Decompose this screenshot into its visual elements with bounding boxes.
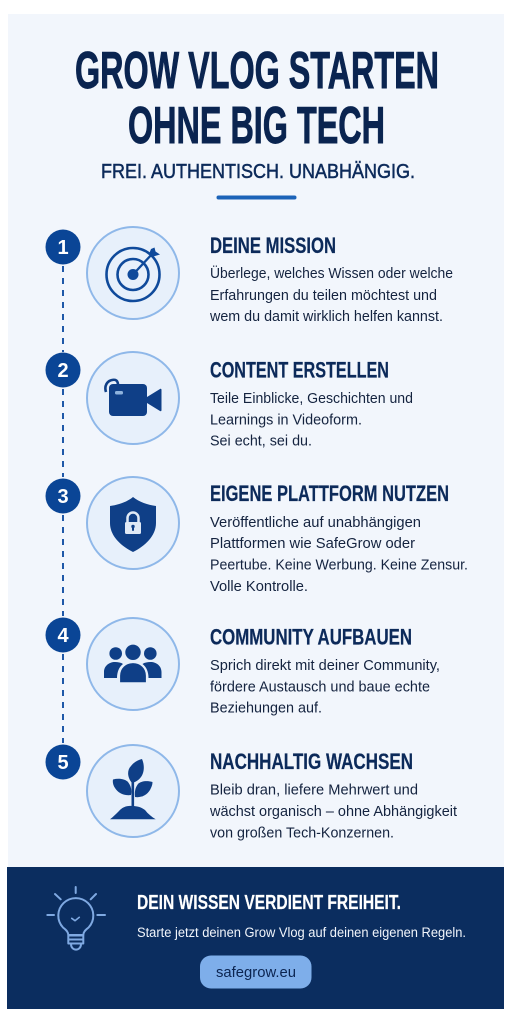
number badge 2: 2	[57, 360, 69, 382]
description	[210, 391, 413, 450]
description	[210, 658, 440, 716]
accent divider	[216, 196, 296, 200]
description: Sei echt, sei du.	[210, 434, 312, 450]
title	[75, 42, 439, 155]
icon: shield with lock	[87, 477, 179, 569]
description: Learnings in Videoform.	[210, 412, 362, 428]
description: Überlege, welches Wissen oder welche	[210, 264, 453, 282]
number badge 5: 5	[57, 752, 69, 774]
description: wächst organisch – ohne Abhängigkeit	[209, 804, 457, 820]
icon: light bulb	[47, 887, 105, 950]
footer heading: DEIN WISSEN VERDIENT FREIHEIT.	[137, 892, 401, 914]
step 5: Nachhaltig wachsen	[46, 744, 457, 842]
description: Volle Kontrolle.	[210, 579, 308, 595]
number badge 1: 1	[57, 237, 69, 259]
description: Plattformen wie SafeGrow oder	[210, 536, 415, 552]
step 1: Deine Mission	[46, 227, 453, 325]
description	[210, 515, 468, 595]
dashed timeline	[62, 266, 64, 743]
number badge 3	[46, 478, 80, 514]
icon: community group	[87, 618, 179, 710]
heading: DEINE MISSION	[210, 233, 336, 258]
number badge 4	[46, 618, 80, 652]
description: von großen Tech-Konzernen.	[210, 826, 394, 842]
button: safegrow.eu: safegrow.eu	[216, 964, 296, 981]
heading: CONTENT ERSTELLEN	[210, 358, 389, 382]
description: Beziehungen auf.	[210, 700, 322, 716]
description: Teile Einblicke, Geschichten und	[210, 391, 413, 407]
subtitle: FREI. AUTHENTISCH. UNABHÄNGIG.	[101, 161, 415, 183]
icon: video camera	[87, 352, 179, 444]
description: Bleib dran, liefere Mehrwert und	[210, 782, 418, 798]
step 4: Community aufbauen	[46, 618, 440, 716]
number badge 3: 3	[57, 486, 69, 508]
icon: sprouting plant	[87, 745, 179, 837]
description: wem du damit wirklich helfen kannst.	[209, 309, 443, 325]
description: Peertube. Keine Werbung. Keine Zensur.	[210, 558, 468, 574]
description	[209, 264, 453, 325]
number badge 2	[46, 352, 80, 388]
step 3: Eigene Plattform nutzen	[46, 477, 468, 595]
number badge 1	[46, 230, 80, 264]
number badge 5	[46, 744, 80, 780]
button: safegrow.eu	[200, 956, 312, 988]
footer text: Starte jetzt deinen Grow Vlog auf deinen eigenen Regeln.	[137, 925, 466, 940]
heading: COMMUNITY AUFBAUEN	[210, 624, 412, 650]
description: Erfahrungen du teilen möchtest und	[210, 288, 437, 304]
description: Sprich direkt mit deiner Community,	[210, 658, 440, 674]
footer banner	[7, 867, 504, 1009]
description	[209, 782, 457, 842]
description: fördere Austausch und baue echte	[210, 680, 430, 696]
icon: target	[87, 227, 179, 319]
step 2: Content erstellen	[46, 352, 413, 450]
number badge 4: 4	[57, 625, 69, 647]
heading: NACHHALTIG WACHSEN	[210, 749, 413, 774]
description: Veröffentliche auf unabhängigen	[210, 515, 421, 531]
